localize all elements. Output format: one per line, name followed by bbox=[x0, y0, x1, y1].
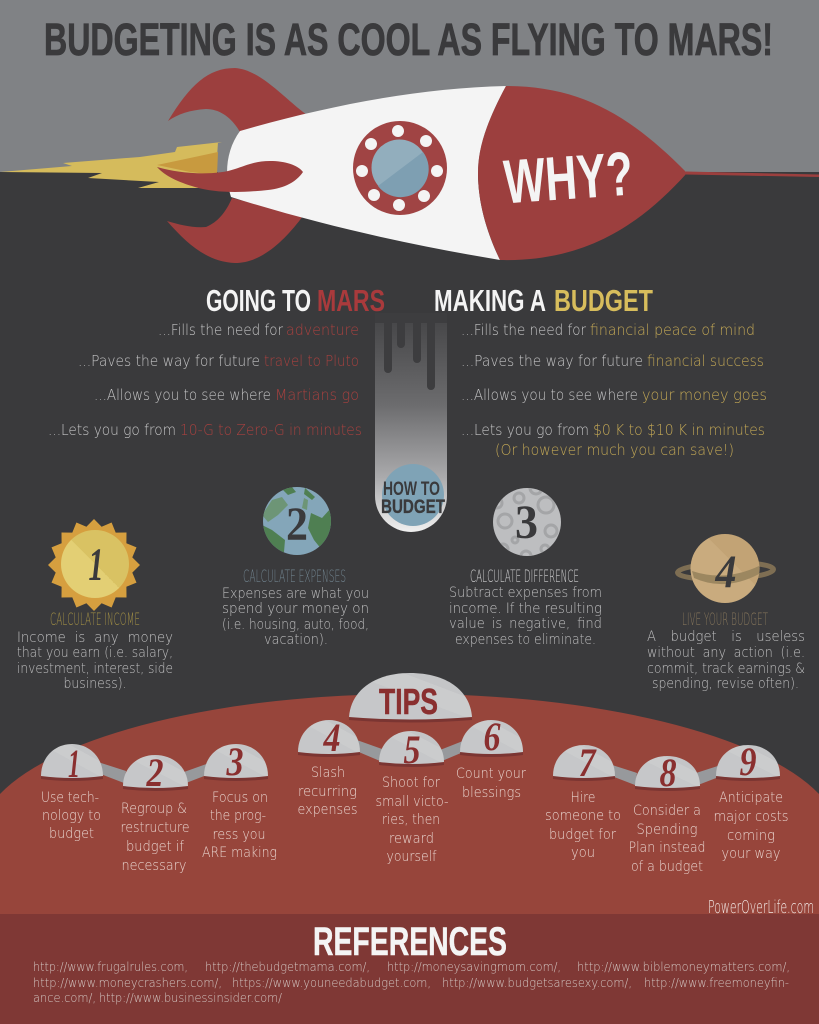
text block: budget comparison: ...Allows you to see where bbox=[461, 386, 638, 404]
tip 5: Shoot for bbox=[382, 775, 440, 791]
tip 8 bbox=[628, 750, 706, 875]
tip 9: coming bbox=[727, 828, 775, 844]
connectors: tips 4 to 6 bbox=[354, 739, 468, 761]
porthole bbox=[353, 121, 447, 215]
text block: budget comparison: ...Paves the way for future bbox=[461, 352, 643, 370]
reference links: http://www.businessinsider.com/ bbox=[99, 990, 283, 1005]
step description: value is negative, find bbox=[449, 616, 602, 632]
background: grey upper sky bbox=[0, 0, 819, 172]
step description bbox=[222, 586, 369, 648]
step description: spend your money on bbox=[222, 601, 369, 617]
step description: vacation). bbox=[264, 632, 328, 648]
tip 9: 9 bbox=[740, 739, 756, 784]
top fin bbox=[168, 68, 311, 132]
reference links: http://moneysavingmom.com/, bbox=[387, 959, 561, 974]
reference links: https://www.youneedabudget.com, bbox=[232, 975, 431, 990]
text block: mars comparison bbox=[48, 321, 362, 439]
icon: earth: 2 bbox=[286, 498, 308, 551]
step description: that you earn (i.e. salary, bbox=[17, 645, 173, 661]
tip 5: yourself bbox=[386, 849, 437, 865]
text block: mars comparison: 10-G to Zero-G in minutes bbox=[180, 421, 362, 439]
step title: CALCULATE EXPENSES bbox=[243, 567, 346, 587]
step 1: calculate income bbox=[17, 519, 173, 692]
step title: CALCULATE DIFFERENCE bbox=[470, 567, 579, 587]
heading: making a budget: MAKING A bbox=[434, 283, 546, 318]
text block: budget comparison: financial peace of mind bbox=[590, 321, 755, 339]
tip 9: major costs bbox=[714, 809, 788, 825]
flame bbox=[0, 142, 222, 188]
reference links: http://www.frugalrules.com, bbox=[33, 959, 188, 974]
step 4: live your budget bbox=[647, 534, 805, 692]
tip 4: Slash bbox=[311, 765, 345, 781]
icon: sun bbox=[48, 519, 140, 611]
tip 5: reward bbox=[389, 831, 434, 847]
tip 5: 5 bbox=[404, 727, 420, 772]
tip 5: small victo- bbox=[376, 794, 448, 810]
tip 2: Regroup & bbox=[121, 801, 187, 817]
tip 9: Anticipate bbox=[719, 790, 783, 806]
tip 3: the prog- bbox=[210, 808, 266, 824]
text block: mars comparison: Martians go bbox=[275, 386, 359, 404]
connectors: tips 1 to 3 bbox=[98, 762, 212, 783]
tip 1: budget bbox=[49, 826, 94, 842]
tip 9: your way bbox=[722, 846, 780, 862]
tips heading dome bbox=[349, 673, 472, 722]
tip 7: 7 bbox=[578, 740, 597, 785]
tip 7: Hire bbox=[570, 790, 596, 806]
how to budget heading: BUDGET bbox=[381, 497, 445, 518]
tips heading dome: TIPS bbox=[379, 681, 438, 722]
reference links: http://www.biblemoneymatters.com/, bbox=[577, 959, 790, 974]
tip 2: 2 bbox=[146, 750, 164, 795]
reference links: ance.com/, bbox=[33, 990, 96, 1005]
tip 1: Use tech- bbox=[41, 790, 99, 806]
falling trail with how to budget planet bbox=[375, 310, 447, 532]
tip 7: you bbox=[571, 845, 595, 861]
text block: mars comparison: ...Fills the need for bbox=[158, 321, 284, 339]
text block: budget comparison bbox=[461, 321, 767, 459]
heading: going to mars: MARS bbox=[317, 283, 385, 318]
icon: moon bbox=[493, 488, 561, 556]
step description bbox=[647, 629, 805, 692]
step description: spending, revise often). bbox=[652, 676, 799, 692]
tip 6: blessings bbox=[462, 785, 521, 801]
connectors: tips 7 to 9 bbox=[609, 764, 724, 785]
icon: moon: 3 bbox=[515, 496, 538, 549]
icon: earth bbox=[263, 487, 331, 555]
step 3: calculate difference bbox=[449, 482, 602, 648]
step description bbox=[17, 630, 173, 692]
step 2: calculate expenses bbox=[222, 487, 369, 648]
tip 6: Count your bbox=[456, 766, 526, 782]
tip 1 bbox=[41, 741, 103, 842]
tip 8: Plan instead bbox=[628, 840, 706, 856]
rocket bbox=[0, 68, 819, 263]
rocket body bbox=[227, 86, 506, 260]
WHY? label: WHY? bbox=[502, 140, 635, 217]
blue planet bbox=[382, 464, 444, 526]
heading: going to mars: GOING TO bbox=[206, 283, 311, 318]
step description bbox=[449, 585, 602, 648]
text block: budget comparison: financial success bbox=[647, 352, 764, 370]
text block: budget comparison: (Or however much you can save!) bbox=[495, 441, 734, 459]
tip 1: nology to bbox=[42, 808, 101, 824]
tip 2: necessary bbox=[122, 858, 186, 874]
text block: mars comparison: ...Paves the way for future bbox=[78, 352, 260, 370]
references band bbox=[0, 914, 819, 1024]
tip 3: 3 bbox=[226, 739, 244, 784]
references heading: REFERENCES bbox=[313, 920, 507, 964]
step description: (i.e. housing, auto, food, bbox=[222, 617, 369, 633]
rocket nose bbox=[478, 86, 687, 260]
text block: mars comparison: adventure bbox=[286, 321, 359, 339]
tip 7: someone to bbox=[545, 808, 621, 824]
reference links bbox=[33, 959, 790, 1005]
bottom fin bbox=[167, 198, 303, 263]
tip 2 bbox=[120, 750, 190, 874]
tip 1: 1 bbox=[68, 741, 80, 786]
tip 3 bbox=[202, 739, 277, 861]
tip 4: 4 bbox=[323, 715, 340, 760]
tip 8: Spending bbox=[636, 822, 698, 838]
text block: budget comparison: ...Lets you go from bbox=[461, 421, 589, 439]
tip 3: Focus on bbox=[212, 790, 268, 806]
tip 7 bbox=[545, 740, 621, 861]
heading: making a budget: BUDGET bbox=[554, 283, 653, 318]
text block: mars comparison: ...Lets you go from bbox=[48, 421, 176, 439]
step description: commit, track earnings & bbox=[647, 661, 805, 677]
tip 4: recurring bbox=[298, 784, 357, 800]
tip 3: ress you bbox=[212, 827, 266, 843]
middle fin bbox=[157, 161, 303, 192]
tip 2: budget if bbox=[126, 839, 184, 855]
text block: budget comparison: ...Fills the need for bbox=[461, 321, 587, 339]
tip 7: budget for bbox=[549, 827, 616, 843]
step description: expenses to eliminate. bbox=[455, 632, 596, 648]
tip 6: 6 bbox=[484, 714, 500, 759]
text block: budget comparison: your money goes bbox=[642, 386, 767, 404]
gradient trail bbox=[375, 313, 447, 532]
reference links: http://www.freemoneyfin- bbox=[644, 975, 789, 990]
tip 4: expenses bbox=[298, 802, 358, 818]
engine nozzle bbox=[217, 133, 240, 175]
icon: saturn bbox=[677, 534, 774, 603]
step title: CALCULATE INCOME bbox=[50, 610, 140, 630]
mars surface bbox=[0, 694, 819, 914]
drips bbox=[375, 310, 447, 386]
step description: A budget is useless bbox=[647, 629, 805, 645]
how to budget heading: HOW TO bbox=[383, 479, 440, 500]
tip 8: Consider a bbox=[633, 803, 701, 819]
step description: investment, interest, side bbox=[17, 661, 173, 677]
panel: mars surface tips bbox=[0, 673, 819, 918]
step description: Income is any money bbox=[17, 630, 173, 646]
reference links: http://www.budgetsaresexy.com/, bbox=[442, 975, 632, 990]
panel: references bbox=[0, 914, 819, 1024]
tip 9 bbox=[714, 739, 788, 862]
tip 8: 8 bbox=[660, 750, 676, 795]
reference links: http://www.moneycrashers.com/, bbox=[33, 975, 222, 990]
text block: mars comparison: travel to Pluto bbox=[264, 352, 359, 370]
how to budget heading bbox=[381, 479, 445, 518]
step description: income. If the resulting bbox=[449, 601, 602, 617]
reference links: http://thebudgetmama.com/, bbox=[205, 959, 370, 974]
tip 6 bbox=[456, 714, 526, 801]
tip 8: of a budget bbox=[631, 859, 703, 875]
icon: sun: 1 bbox=[88, 539, 104, 591]
tip 4 bbox=[298, 715, 360, 818]
text block: budget comparison: $0 K to $10 K in minutes bbox=[593, 421, 765, 439]
step description: Expenses are what you bbox=[222, 586, 369, 602]
text block: mars comparison: ...Allows you to see where bbox=[94, 386, 271, 404]
tip 3: ARE making bbox=[202, 845, 277, 861]
step description: Subtract expenses from bbox=[449, 585, 602, 601]
step description: without any action (i.e. bbox=[647, 645, 805, 661]
tip 5: ries, then bbox=[382, 812, 440, 828]
rocket trail line bbox=[686, 172, 819, 177]
step description: business). bbox=[64, 676, 126, 692]
tip 5 bbox=[376, 727, 448, 865]
tip 2: restructure bbox=[120, 820, 190, 836]
icon: saturn: 4 bbox=[715, 546, 736, 598]
